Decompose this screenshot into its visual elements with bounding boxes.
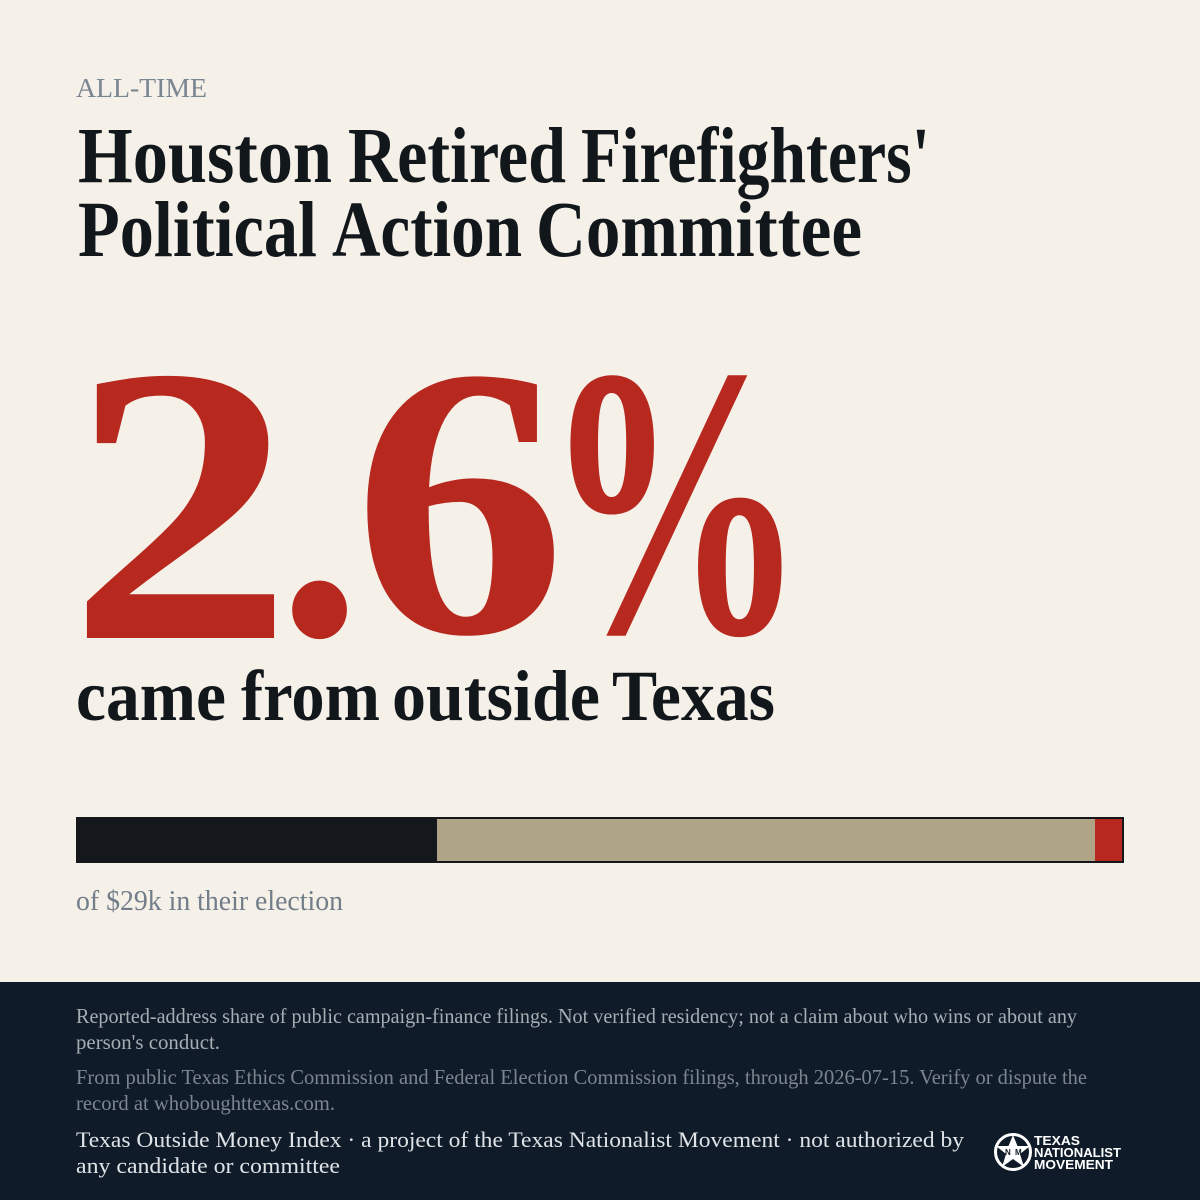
icon: star emblem: M (1015, 1148, 1022, 1157)
title: Houston (78, 113, 332, 200)
icon: star emblem: N (1005, 1148, 1011, 1157)
icon: TNM logo (996, 1133, 1121, 1172)
source text: record at whoboughttexas.com. (76, 1091, 335, 1115)
eyebrow label: ALL-TIME (76, 73, 207, 103)
title (78, 113, 930, 274)
stacked bar chart (76, 817, 1124, 863)
big percentage: 2 (68, 285, 293, 724)
big percentage (68, 285, 806, 724)
title: Action (332, 187, 522, 274)
panel: footer (0, 982, 1200, 1200)
logo wordmark (1034, 1133, 1121, 1172)
logo wordmark: TEXAS (1034, 1133, 1080, 1148)
disclaimer text: Reported-address share of public campaign-finance filings. Not verified residency; not a claim about who wins or about any (76, 1004, 1077, 1028)
big percentage: % (544, 289, 806, 716)
subheading: Texas (612, 656, 775, 736)
attribution text: any candidate or committee (76, 1153, 340, 1178)
subheading (76, 656, 775, 736)
source text: From public Texas Ethics Commission and Federal Election Commission filings, through 2026-07-15. Verify or dispute the (76, 1065, 1087, 1089)
bar caption: of $29k in their election (76, 886, 343, 917)
title: Committee (536, 187, 862, 274)
subheading: outside (392, 656, 600, 736)
big percentage: . (277, 313, 362, 713)
title: Firefighters' (581, 113, 930, 200)
subheading: came (76, 656, 226, 736)
title: Political (78, 187, 317, 274)
disclaimer text: person's conduct. (76, 1030, 220, 1054)
logo wordmark: NATIONALIST (1034, 1145, 1121, 1160)
subheading: from (241, 656, 380, 736)
attribution text: Texas Outside Money Index · a project of the Texas Nationalist Movement · not authorized by (76, 1127, 964, 1152)
attribution text (76, 1127, 964, 1178)
source text (76, 1065, 1087, 1115)
logo wordmark: MOVEMENT (1034, 1157, 1113, 1172)
icon: star emblem (996, 1134, 1030, 1170)
title: Retired (348, 113, 566, 200)
big percentage: 6 (353, 289, 566, 716)
disclaimer text (76, 1004, 1077, 1054)
